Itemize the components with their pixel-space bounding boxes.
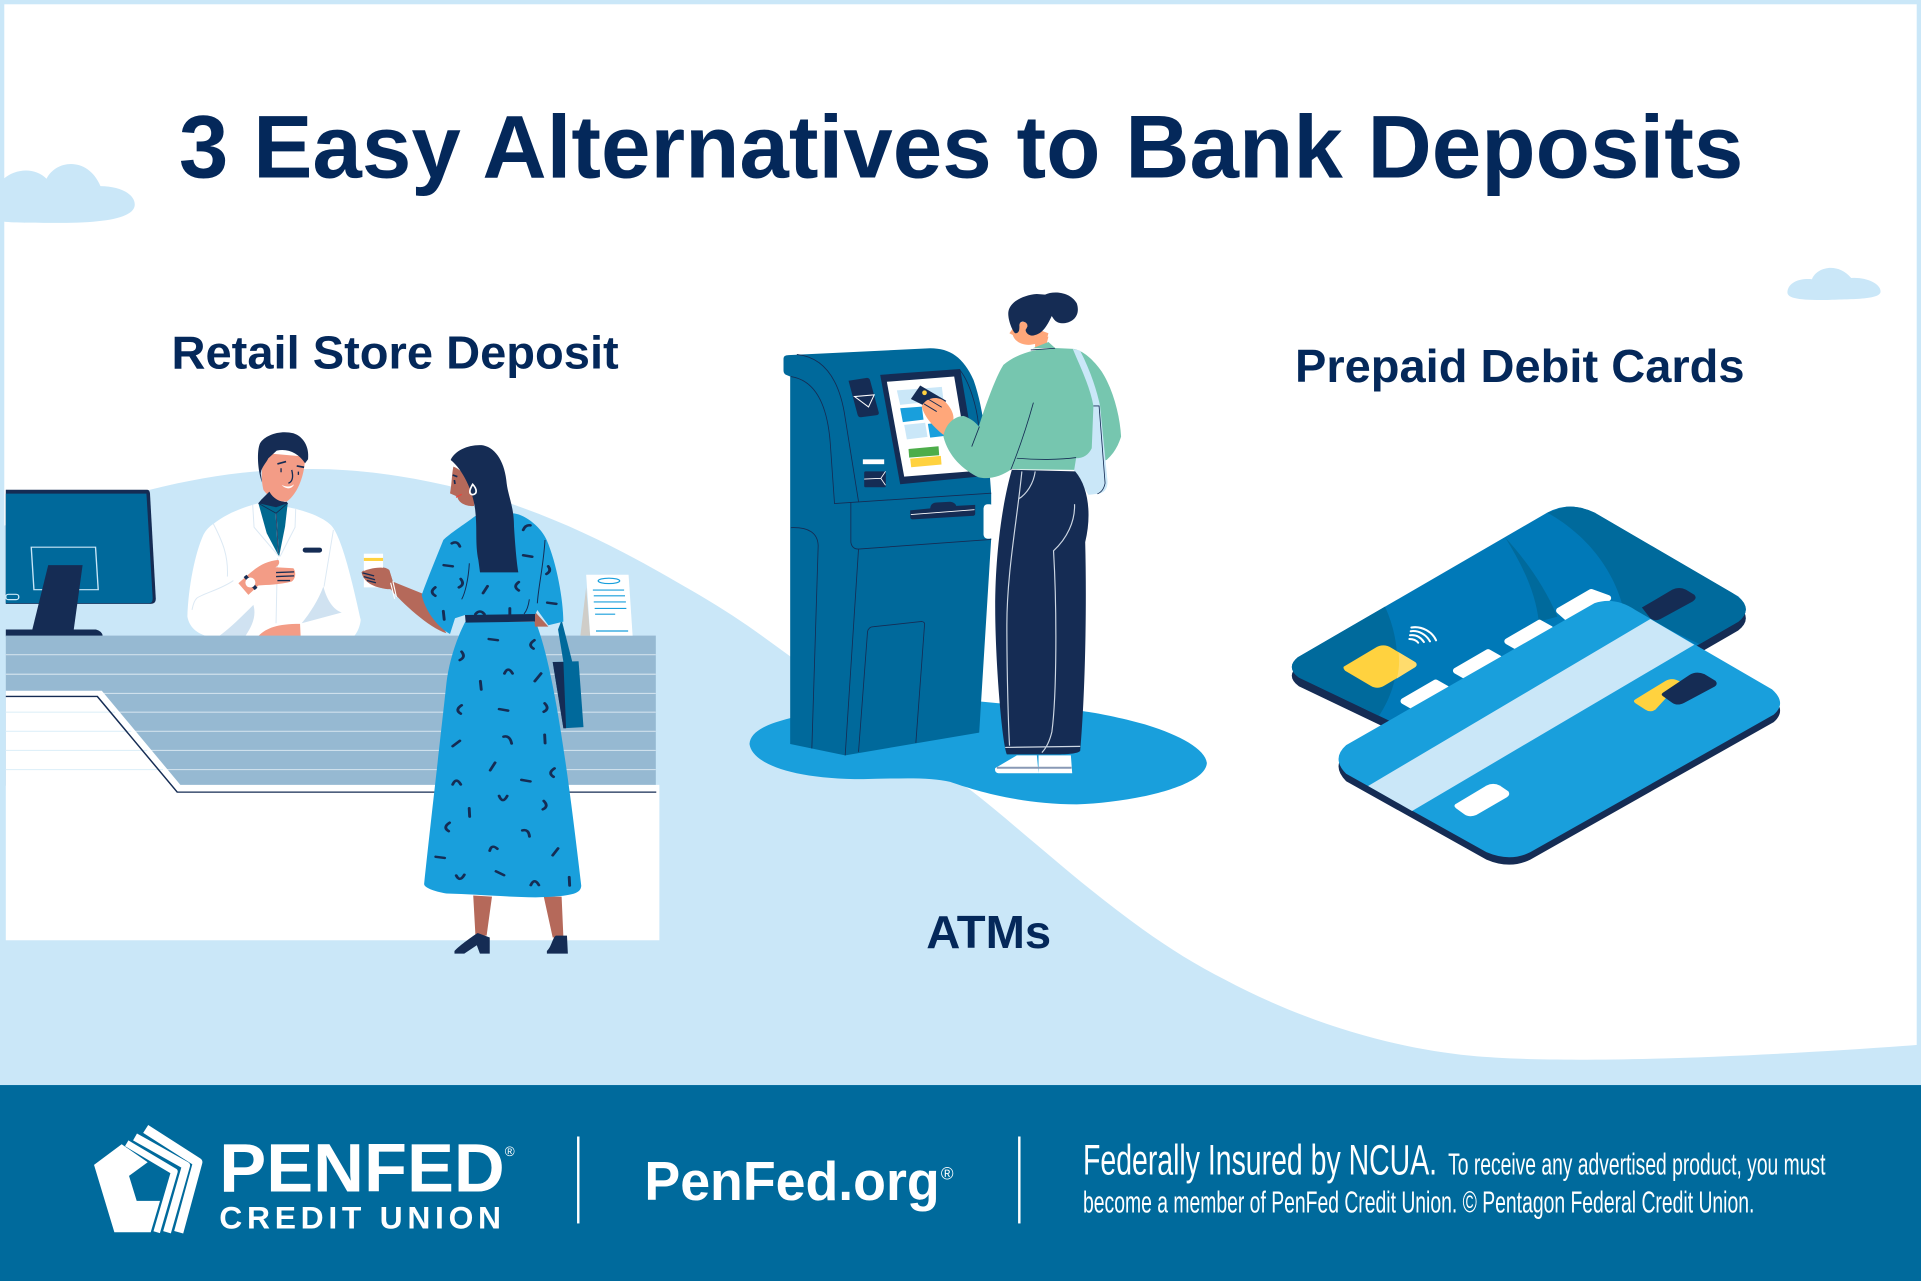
- atm machine: [784, 348, 994, 755]
- computer monitor: [6, 490, 156, 636]
- website url: ®: [941, 1163, 954, 1183]
- legal disclaimer: [1083, 1136, 1826, 1219]
- atm customer: [922, 292, 1121, 773]
- penfed pentagon logo mark: [94, 1129, 198, 1232]
- back card: [1292, 506, 1746, 726]
- teller: [187, 432, 361, 638]
- table tent sign: [580, 575, 633, 636]
- illustration: retail store counter with teller and customer: [6, 432, 659, 954]
- cloud right: [1787, 268, 1881, 300]
- floor shadow blob: [750, 702, 1207, 804]
- atm screen: [880, 369, 979, 484]
- title: 3 Easy Alternatives to Bank Deposits: [179, 97, 1743, 197]
- counter front white panel: [6, 691, 659, 940]
- penfed wordmark: PENFED: [219, 1130, 505, 1207]
- penfed wordmark: ®: [505, 1144, 515, 1159]
- illustration: person using atm: [750, 292, 1207, 804]
- background hill wave: [0, 469, 1921, 1090]
- heading: atms: ATMs: [926, 906, 1051, 958]
- divider two: [1018, 1136, 1021, 1223]
- counter top with stripes: [6, 636, 656, 786]
- heading: prepaid debit cards: Prepaid Debit Cards: [1295, 340, 1745, 392]
- illustration: two prepaid debit cards: [1270, 493, 1780, 865]
- heading: retail store deposit: Retail Store Deposit: [172, 327, 619, 379]
- divider one: [577, 1136, 579, 1223]
- penfed wordmark: [219, 1130, 515, 1235]
- front card: [1339, 601, 1780, 865]
- website url: PenFed.org: [644, 1150, 940, 1212]
- cloud left: [4, 164, 135, 223]
- customer with cup, blue dress and bag: [362, 445, 583, 954]
- footer band: [0, 1085, 1921, 1281]
- penfed wordmark: CREDIT UNION: [219, 1199, 501, 1235]
- legal disclaimer: Federally Insured by NCUA.: [1083, 1136, 1437, 1184]
